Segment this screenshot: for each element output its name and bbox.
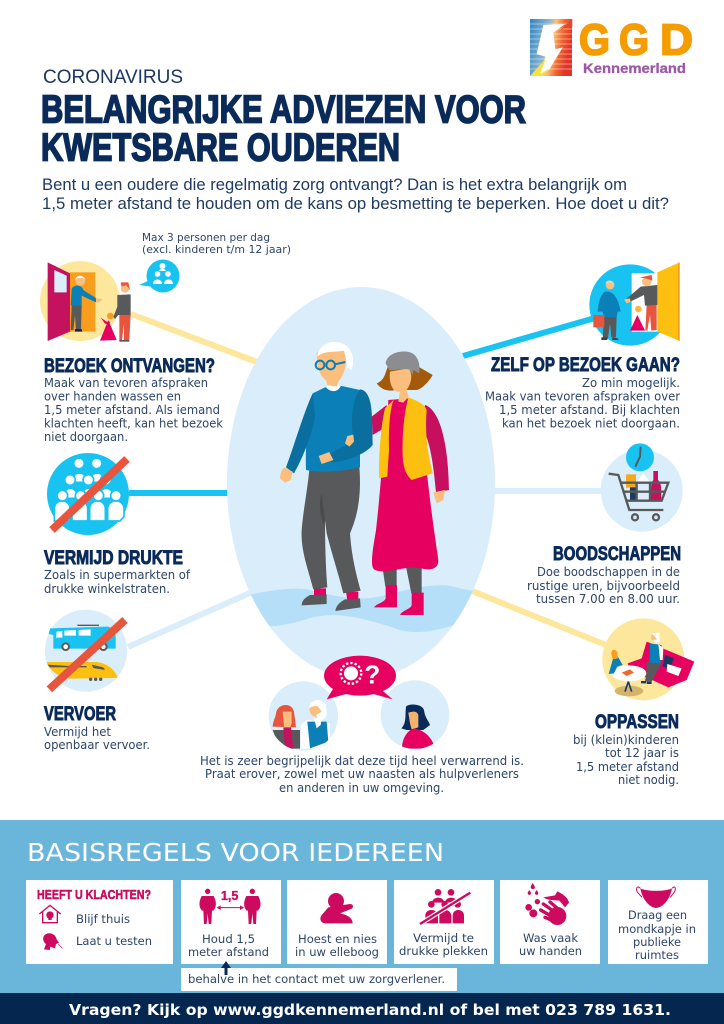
icon: grandparent and child: [602, 618, 694, 700]
callout: max 3 personen: Max 3 personen per dag: [142, 231, 270, 244]
legs and boots: [383, 567, 422, 593]
card: vermijd drukke plekken: drukke plekken: [399, 944, 488, 958]
panel: praten: [200, 656, 524, 795]
card: heeft u klachten: Blijf thuis: [76, 912, 130, 926]
card: was handen: Was vaak: [523, 931, 578, 945]
logo GGD Kennemerland: G: [619, 16, 649, 64]
icon: shopping cart and clock: [601, 443, 683, 532]
text block: Maak van tevoren afspraken over: [485, 390, 680, 404]
footer bar: [0, 993, 724, 1024]
card: houd afstand: 1,5: [221, 889, 238, 903]
icon: visiting at door: [589, 262, 680, 346]
panel: basisregels: [0, 820, 724, 994]
card: was handen: uw handen: [519, 944, 582, 958]
text block: [573, 733, 679, 787]
vest: [379, 399, 394, 478]
heading: BOODSCHAPPEN: [553, 543, 681, 565]
arrow: [221, 961, 231, 975]
logo GGD Kennemerland: [530, 16, 693, 76]
text block: Vermijd het: [44, 725, 111, 739]
text block: Praat erover, zowel met uw naasten als hulpverleners: [205, 767, 519, 781]
text block: openbaar vervoer.: [44, 738, 150, 752]
text block: [485, 376, 680, 430]
text block: kan het bezoek niet doorgaan.: [502, 416, 680, 430]
panel: boodschappen: [527, 443, 683, 606]
card: houd afstand: [181, 880, 281, 964]
card: houd afstand: Houd 1,5: [202, 932, 255, 946]
man trousers and shoes: [314, 588, 358, 601]
panel: vermijd drukte: [44, 453, 191, 596]
ground: [251, 585, 473, 632]
logo GGD Kennemerland: G: [579, 16, 610, 64]
text block: [200, 754, 524, 795]
icon: bus and train crossed out: [45, 610, 127, 692]
card: mondkapje: Draag een: [628, 908, 687, 922]
logo GGD Kennemerland: Kennemerland: [583, 61, 686, 76]
card: heeft u klachten: HEEFT U KLACHTEN?: [37, 887, 151, 902]
text block: over handen wassen en: [44, 390, 181, 404]
panel: oppassen: [573, 618, 694, 787]
man sweater: [306, 386, 360, 472]
connector lines: [128, 314, 606, 647]
woman back arm: [372, 405, 387, 435]
panel: vervoer: [44, 610, 150, 752]
text block: Het is zeer begrijpelijk dat deze tijd heel verwarrend is.: [200, 754, 524, 768]
text block: klachten heeft, kan het bezoek: [44, 416, 223, 430]
text block: en anderen in uw omgeving.: [279, 781, 444, 795]
card: heeft u klachten: [26, 880, 173, 964]
text block: 1,5 meter afstand. Bij klachten: [499, 403, 680, 417]
subtitle: coronavirus: CORONAVIRUS: [43, 67, 183, 88]
text block: Maak van tevoren afspraken: [44, 376, 208, 390]
central oval with couple: [220, 287, 510, 679]
text block: [44, 376, 223, 444]
callout: max 3 personen: (excl. kinderen t/m 12 jaar): [142, 243, 291, 256]
panel: zelf op bezoek gaan: [485, 262, 680, 430]
card: vermijd drukke plekken: [394, 880, 494, 964]
older man and woman: [280, 342, 449, 615]
text block: Zoals in supermarkten of: [44, 568, 191, 582]
icon: people talking with speech bubble: ?: [364, 659, 380, 689]
card: hoest en nies: Hoest en nies: [298, 932, 377, 946]
card: hoest en nies: [287, 880, 387, 964]
text block: Doe boodschappen in de: [537, 565, 680, 579]
note: behalve in contact met zorgverlener: behalve in het contact met uw zorgverlener.: [188, 972, 445, 986]
intro text: 1,5 meter afstand te houden om de kans op besmetting te beperken. Hoe doet u dit?: [42, 195, 669, 213]
footer bar: Vragen? Kijk op www.ggdkennemerland.nl of bel met 023 789 1631.: [69, 1001, 671, 1019]
woman head: [377, 365, 433, 391]
text block: tot 12 jaar is: [605, 746, 679, 760]
text block: [44, 725, 150, 752]
icon: crowd crossed out: [47, 453, 129, 535]
text block: [527, 565, 680, 606]
heading: BASISREGELS VOOR IEDEREEN: [27, 838, 444, 867]
icon: people talking with speech bubble: [269, 656, 449, 751]
man head: [326, 383, 341, 391]
card: hoest en nies: in uw elleboog: [295, 945, 379, 959]
text block: drukke winkelstraten.: [44, 582, 170, 596]
intro text: Bent u een oudere die regelmatig zorg ontvangt? Dan is het extra belangrijk om: [42, 176, 627, 194]
card: houd afstand: meter afstand: [188, 945, 269, 959]
text block: tussen 7.00 en 8.00 uur.: [536, 592, 680, 606]
logo GGD Kennemerland: D: [660, 16, 693, 64]
heading: BEZOEK ONTVANGEN?: [44, 355, 215, 377]
text block: bij (klein)kinderen: [573, 733, 679, 747]
main title: BELANGRIJKE ADVIEZEN VOOR: [41, 88, 526, 132]
main title: [41, 88, 526, 170]
panel: bezoek ontvangen: [40, 231, 291, 444]
note: behalve in contact met zorgverlener: [181, 968, 457, 991]
text block: niet doorgaan.: [44, 430, 128, 444]
heading: OPPASSEN: [595, 711, 679, 733]
heading: VERVOER: [44, 703, 116, 725]
heading: VERMIJD DRUKTE: [44, 547, 183, 569]
card: mondkapje: ruimtes: [635, 948, 679, 962]
text block: [44, 568, 191, 596]
text block: 1,5 meter afstand: [576, 760, 679, 774]
card: heeft u klachten: Laat u testen: [76, 934, 152, 948]
text block: rustige uren, bijvoorbeeld: [527, 579, 680, 593]
callout: max 3 personen: [139, 231, 291, 292]
intro text: [42, 176, 669, 213]
text block: niet nodig.: [618, 773, 679, 787]
card: was handen: [500, 880, 600, 964]
card: mondkapje: [608, 880, 708, 964]
icon: visitors at door: [40, 261, 131, 342]
card: mondkapje: mondkapje in: [618, 922, 696, 936]
card: vermijd drukke plekken: Vermijd te: [413, 931, 474, 945]
skirt: [372, 470, 438, 571]
main title: KWETSBARE OUDEREN: [41, 126, 400, 170]
text block: Zo min mogelijk.: [582, 376, 680, 390]
card: mondkapje: publieke: [633, 935, 681, 949]
text block: 1,5 meter afstand. Als iemand: [44, 403, 220, 417]
